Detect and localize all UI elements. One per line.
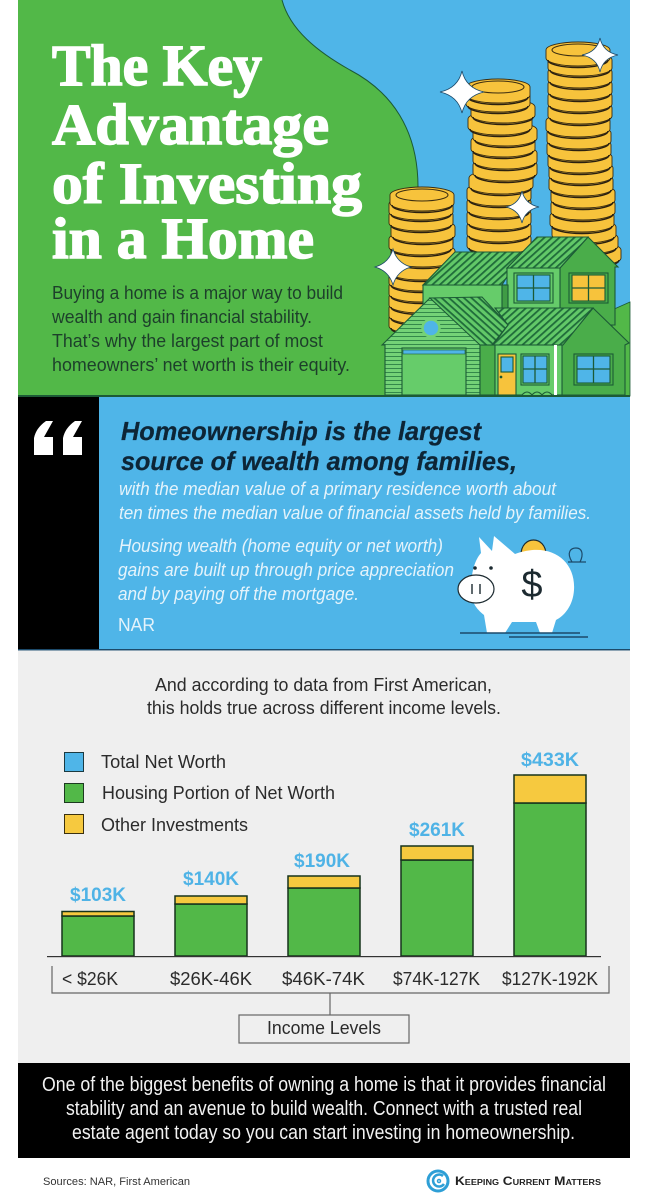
green background shape <box>18 0 418 396</box>
upper gable wall <box>560 237 618 325</box>
right hill <box>612 302 630 396</box>
front door <box>498 354 516 395</box>
intro text: wealth and gain financial stability. <box>51 306 312 327</box>
quote body: and by paying off the mortgage. <box>118 583 359 604</box>
ground line <box>18 395 630 397</box>
quote body: with the median value of a primary residence worth about <box>119 478 557 499</box>
income range labels <box>62 968 599 989</box>
logo: Keeping Current Matters <box>455 1174 602 1188</box>
coin stack: middle <box>466 79 537 256</box>
coin stack: right <box>546 42 621 268</box>
coin stack: left <box>389 187 455 336</box>
call to action band: stability and an avenue to build wealth. Connect with a trusted real <box>66 1098 582 1120</box>
bar: 26K-46K <box>175 896 247 956</box>
sparkle: center <box>506 191 539 223</box>
sparkle: middle stack <box>440 71 484 113</box>
value labels: $190K <box>294 850 350 872</box>
value labels: $103K <box>70 884 126 906</box>
quote heading: Homeownership is the largest <box>121 416 482 446</box>
income range labels: $127K-192K <box>502 968 599 989</box>
quote panel <box>18 397 630 650</box>
income range labels: < $26K <box>62 968 119 989</box>
legend: other investments: Other Investments <box>101 814 248 835</box>
title: The Key <box>52 33 262 98</box>
upper roof <box>507 237 588 268</box>
call to action band <box>18 1063 630 1158</box>
round window <box>422 320 440 336</box>
chart panel <box>18 651 630 1063</box>
hero panel <box>18 0 630 397</box>
bar chart <box>47 749 601 957</box>
sparkle: left stack <box>375 249 411 285</box>
quote body <box>118 478 591 604</box>
intro text: That’s why the largest part of most <box>52 330 323 351</box>
income levels box <box>239 1015 409 1043</box>
sparkle: right stack <box>582 38 618 72</box>
legend: housing portion: Housing Portion of Net Worth <box>102 782 335 803</box>
title: in a Home <box>52 206 314 271</box>
door-side window <box>521 354 549 385</box>
intro text: homeowners’ net worth is their equity. <box>52 354 350 375</box>
quote heading <box>121 416 517 476</box>
sources: Sources: NAR, First American <box>43 1176 190 1188</box>
quote body: Housing wealth (home equity or net worth) <box>119 535 443 556</box>
quotation mark icon <box>34 421 82 455</box>
quote heading: source of wealth among families, <box>121 446 517 476</box>
shrubs <box>522 392 552 395</box>
white trim <box>554 345 557 395</box>
bar: under 26K <box>62 912 134 956</box>
title <box>52 33 362 271</box>
middle wall <box>480 345 495 395</box>
logo <box>428 1171 602 1191</box>
income range labels: $26K-46K <box>170 968 253 989</box>
lower right roof <box>493 308 593 345</box>
intro text <box>51 282 350 375</box>
left roof <box>430 297 508 345</box>
title: Advantage <box>52 92 329 157</box>
icon: swirl <box>428 1171 448 1191</box>
bar: 74K-127K <box>401 846 473 956</box>
bar: 127K-192K <box>514 775 586 956</box>
value labels: $433K <box>521 749 579 771</box>
income bracket <box>52 966 609 1015</box>
upper yellow window <box>569 273 608 303</box>
value labels: $261K <box>409 819 465 841</box>
back roof <box>423 252 522 285</box>
value labels: $140K <box>183 868 239 890</box>
quote body: ten times the median value of financial assets held by families. <box>119 502 591 523</box>
lower right gable <box>562 308 629 395</box>
call to action band: estate agent today so you can start investing in homeownership. <box>72 1122 575 1144</box>
axis line <box>47 956 601 957</box>
legend: total net worth: Total Net Worth <box>101 751 226 772</box>
value labels <box>70 749 579 906</box>
quote body: gains are built up through price appreciation <box>118 559 454 580</box>
quote source: NAR <box>118 615 155 635</box>
income range labels: $46K-74K <box>282 968 366 989</box>
right window <box>574 354 613 385</box>
house illustration <box>382 237 629 395</box>
legend <box>64 751 335 835</box>
garage door <box>402 348 466 395</box>
upper blue window <box>514 273 553 303</box>
bar: 46K-74K <box>288 876 360 956</box>
income levels box: Income Levels <box>267 1017 381 1038</box>
back wall <box>423 285 513 315</box>
chart intro text: And according to data from First American, <box>155 674 492 695</box>
icon: piggy bank: $ <box>521 564 543 606</box>
title: of Investing <box>52 151 362 216</box>
garage wall <box>382 298 492 395</box>
upper wing wall <box>507 268 560 310</box>
chart intro text: this holds true across different income levels. <box>147 697 501 718</box>
income range labels: $74K-127K <box>393 968 481 989</box>
icon: piggy bank <box>458 536 588 637</box>
green shape edge <box>282 0 418 187</box>
chart intro text <box>147 674 501 718</box>
intro text: Buying a home is a major way to build <box>52 282 343 303</box>
